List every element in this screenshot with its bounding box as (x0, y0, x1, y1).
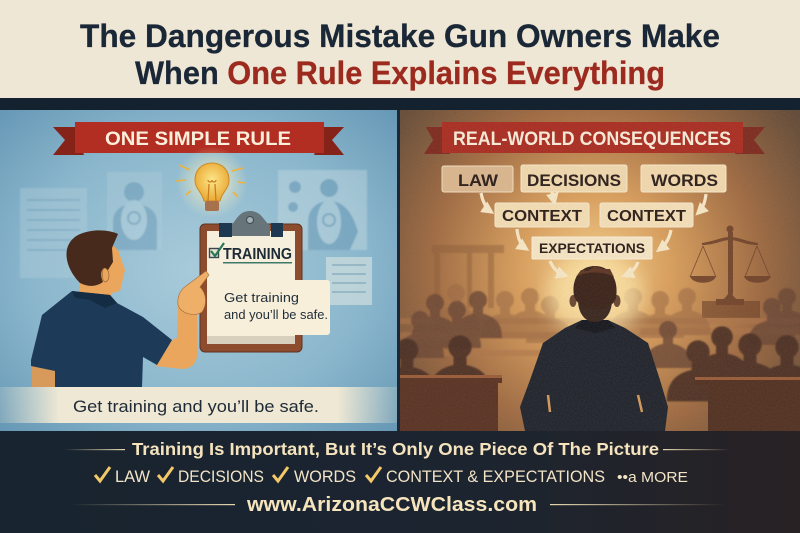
label: law: LAW (458, 172, 498, 190)
banner: real-world consequences: REAL-WORLD CONSEQUENCES (453, 129, 731, 150)
title text (80, 18, 720, 91)
banner: one simple rule (53, 122, 344, 155)
man from behind (520, 266, 668, 431)
label: context right: CONTEXT (607, 208, 687, 225)
label: context left (495, 203, 589, 227)
website url: www.ArizonaCCWClass.com (246, 494, 537, 516)
title band (0, 0, 800, 99)
label: context left: CONTEXT (502, 208, 583, 225)
title text: When One Rule Explains Everything (135, 55, 665, 91)
label: expectations (532, 237, 652, 259)
checklist row (95, 467, 688, 486)
glow behind man (547, 255, 643, 335)
banner: one simple rule: ONE SIMPLE RULE (105, 129, 291, 150)
caption band (0, 387, 397, 423)
panel grain texture (400, 110, 800, 431)
label: decisions: DECISIONS (527, 172, 621, 190)
clipboard clip (219, 211, 283, 237)
label: decisions (521, 165, 627, 192)
arrows: flow of factors (481, 192, 706, 275)
icon: scales of justice (690, 226, 771, 318)
middle audience (396, 288, 800, 368)
footer headline: Training Is Important, But It’s Only One Piece Of The Picture (132, 439, 659, 459)
icon: light bulb (176, 146, 248, 218)
panel: one simple rule (0, 110, 397, 431)
courtroom columns (432, 245, 504, 308)
panel: real-world consequences (377, 110, 800, 431)
checklist sheet (326, 257, 372, 305)
label: context right (600, 203, 693, 227)
man pointing at clipboard (31, 230, 209, 387)
clipboard (200, 211, 302, 352)
sticky note: and you’ll be safe. (224, 308, 328, 322)
caption band: Get training and you’ll be safe. (73, 397, 319, 416)
label: words (641, 165, 726, 192)
label: law (442, 166, 513, 192)
checklist row: WORDS (294, 468, 356, 486)
label: words: WORDS (651, 172, 718, 190)
label: expectations: EXPECTATIONS (539, 241, 645, 256)
far audience (432, 284, 711, 343)
title text: The Dangerous Mistake Gun Owners Make (80, 18, 720, 54)
front benches (400, 375, 800, 431)
checklist row: CONTEXT & EXPECTATIONS (386, 468, 605, 486)
near audience (377, 326, 800, 401)
checklist row: DECISIONS (178, 468, 264, 486)
icon: checkbox (210, 243, 224, 258)
faint background documents and targets (20, 170, 367, 278)
clipboard heading: TRAINING (223, 246, 292, 263)
sticky note: Get training (224, 291, 299, 305)
audience clipped to panel (377, 284, 800, 401)
footer (0, 431, 800, 533)
checklist row: ••a MORE (617, 469, 688, 486)
sticky note (208, 280, 330, 335)
benches (400, 318, 800, 356)
banner: real-world consequences (424, 122, 765, 154)
checklist row: LAW (115, 468, 150, 486)
